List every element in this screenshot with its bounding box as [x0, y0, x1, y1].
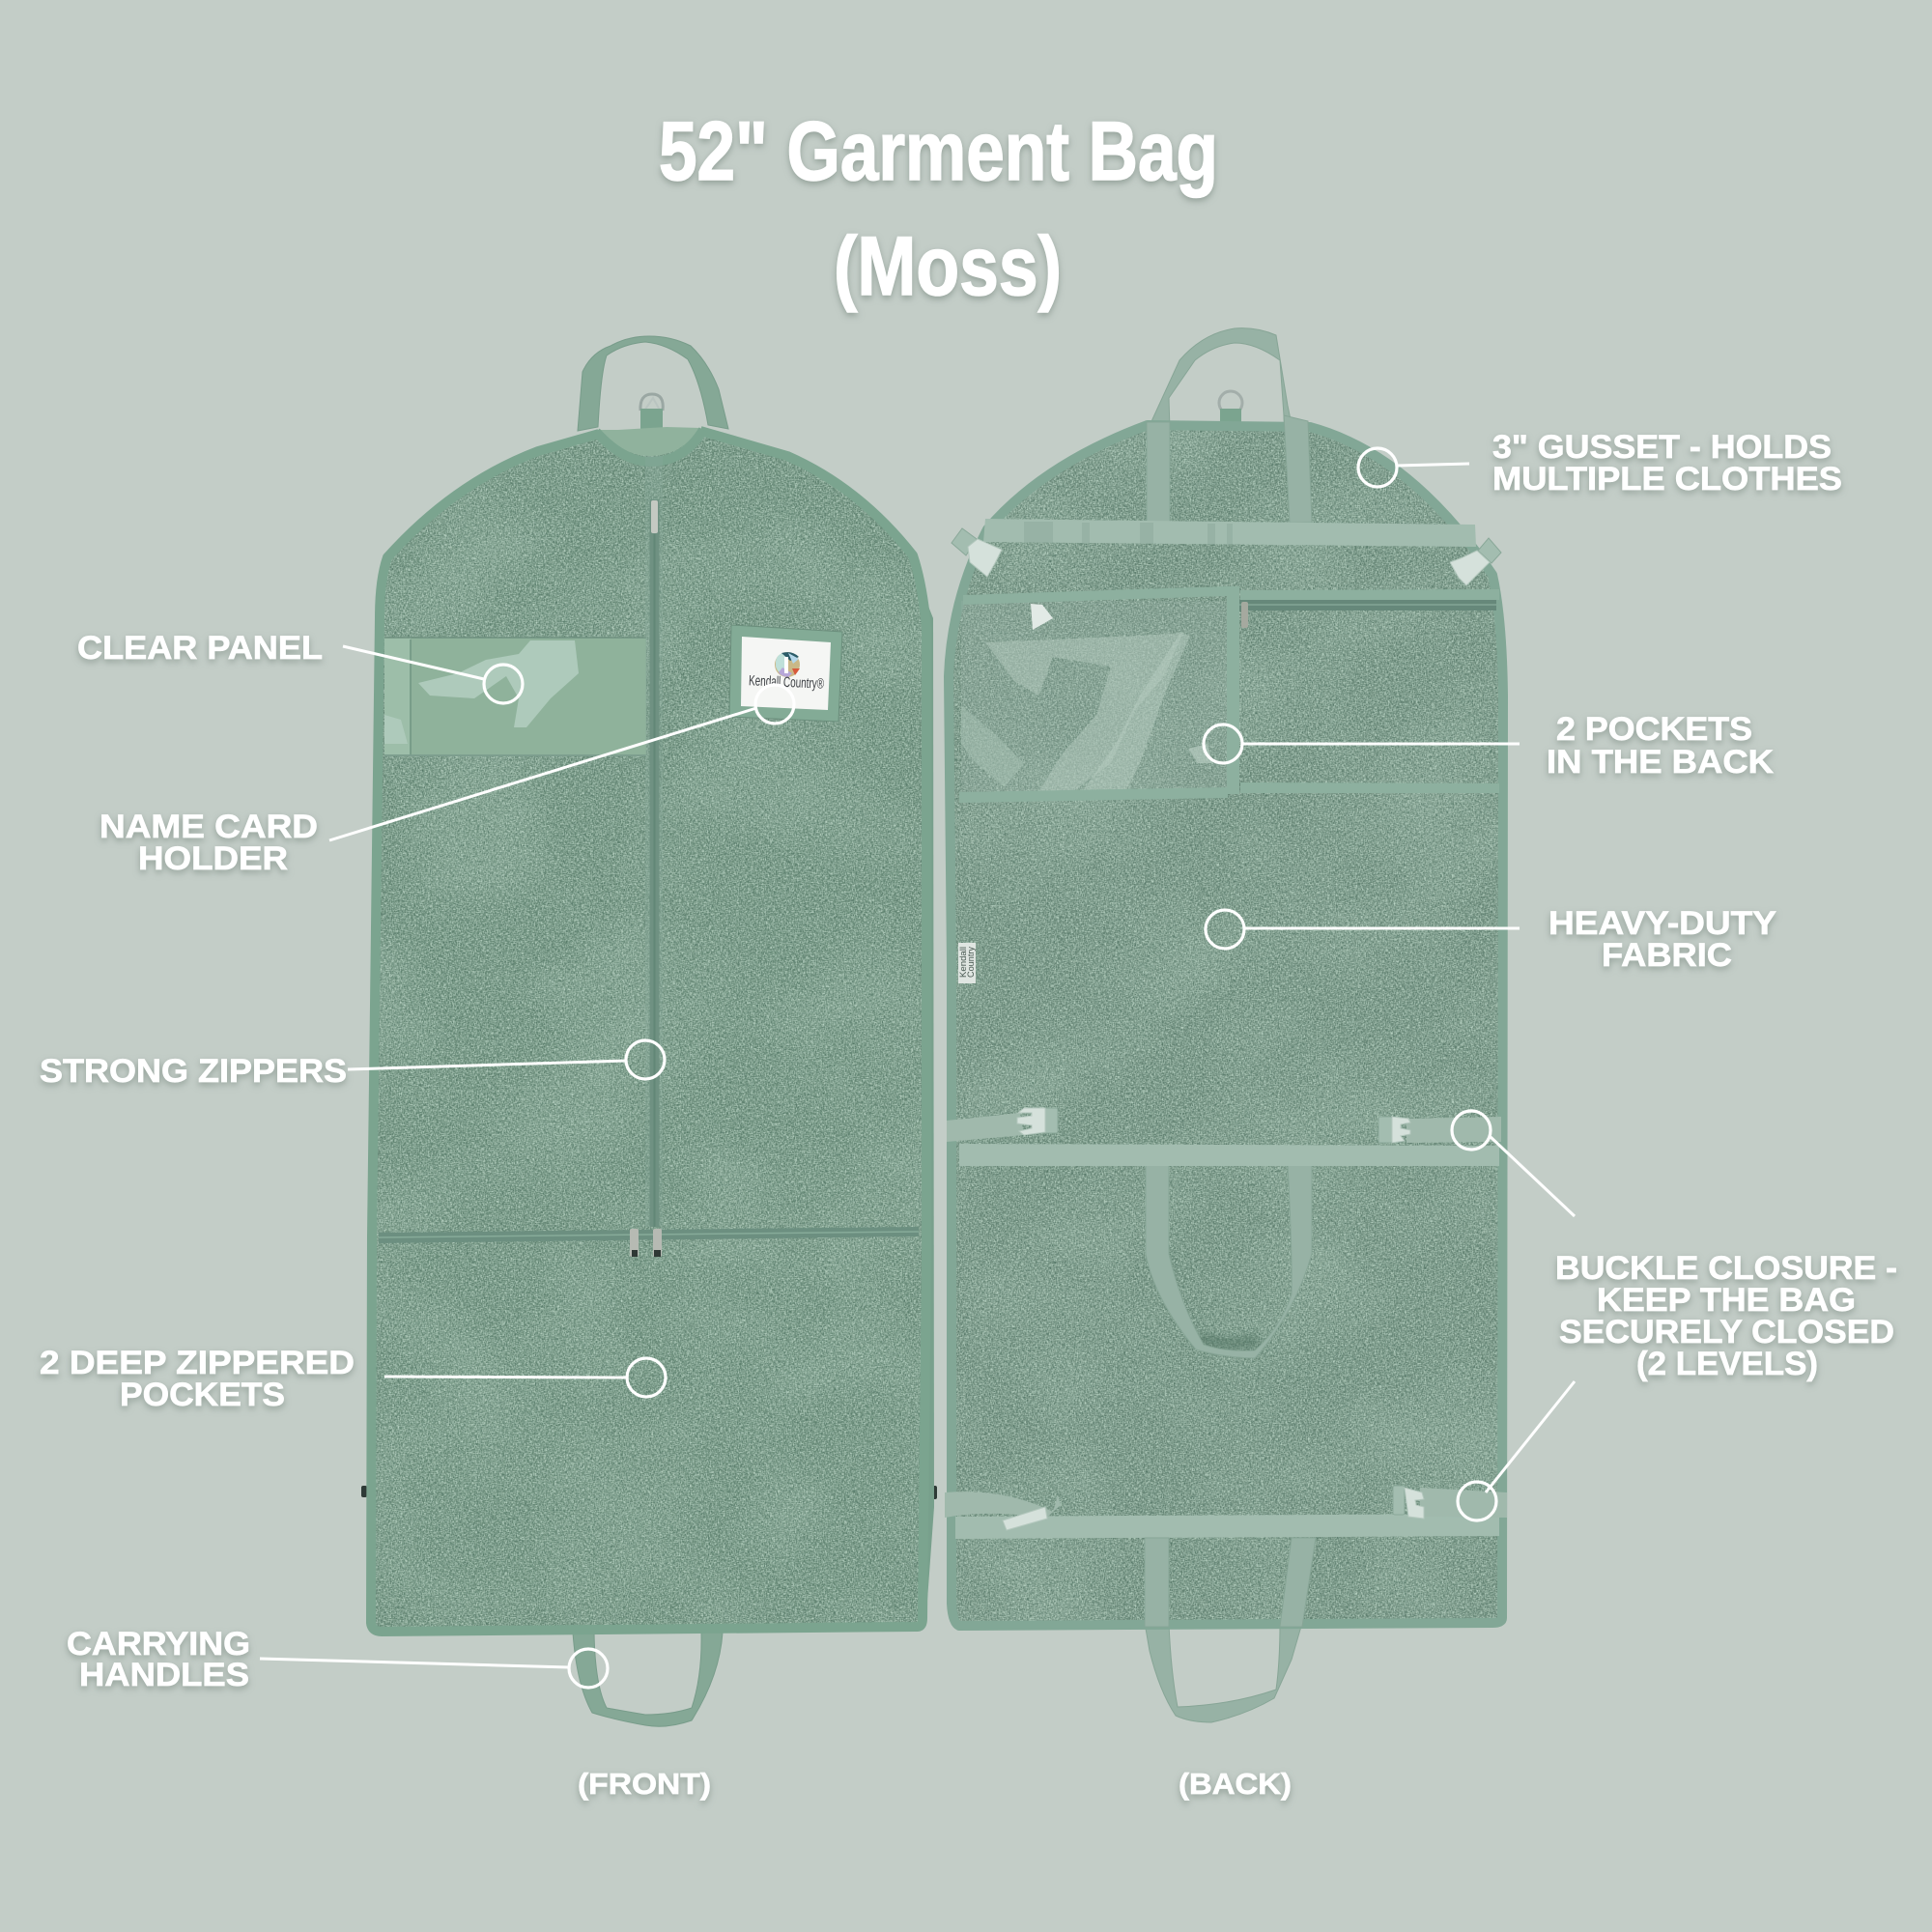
main vertical zipper — [645, 456, 663, 1227]
lower strap bands — [955, 1144, 1499, 1539]
back bottom handle — [1145, 1623, 1302, 1722]
callout: name card holder: HOLDER — [138, 840, 288, 877]
logo mark — [775, 652, 800, 677]
front side snaps — [361, 1486, 937, 1499]
callout: carrying handles: CARRYING — [67, 1626, 250, 1662]
woven side tag: Country — [966, 946, 976, 978]
front garment bag — [361, 336, 937, 1726]
callout: buckle closure: BUCKLE CLOSURE - — [1555, 1250, 1897, 1287]
back garment bag — [945, 328, 1507, 1722]
callout: carrying handles: HANDLES — [79, 1657, 249, 1693]
main zipper pull — [651, 500, 658, 533]
clear pocket — [961, 601, 1227, 792]
logo wordmark: Kendall Country® — [749, 672, 824, 693]
back handle top feet — [1147, 415, 1312, 523]
back D ring — [1219, 391, 1242, 422]
callout: gusset: MULTIPLE CLOTHES — [1492, 461, 1842, 497]
right strap and buckle — [1420, 1488, 1507, 1518]
woven side tag — [958, 943, 976, 983]
back binding — [949, 425, 1503, 1626]
callout: heavy-duty fabric — [1206, 905, 1776, 974]
front top handle — [578, 336, 728, 431]
callout: clear panel: CLEAR PANEL — [77, 630, 323, 667]
callout: buckle closure — [1452, 1111, 1897, 1520]
lower pocket zipper — [379, 1227, 919, 1257]
title: (Moss) — [834, 220, 1062, 313]
callout: name card holder: NAME CARD — [99, 809, 318, 845]
right top buckle — [1478, 538, 1501, 563]
title: 52" Garment Bag — [659, 105, 1218, 198]
callout: buckle closure: KEEP THE BAG — [1597, 1282, 1856, 1319]
callout: carrying handles — [67, 1626, 608, 1693]
callout: 2 deep zippered pockets — [40, 1345, 666, 1413]
left twisted strap and buckle — [945, 1492, 1061, 1519]
front D ring — [640, 394, 663, 433]
back pocket section — [959, 586, 1499, 803]
woven side tag: Kendall — [958, 947, 968, 978]
callout: clear panel — [77, 630, 523, 703]
lower level buckles — [945, 1486, 1507, 1530]
front neck opening — [596, 427, 703, 462]
caption: front: (FRONT) — [578, 1767, 711, 1801]
front bottom handle — [573, 1633, 723, 1726]
top buckles — [952, 528, 1501, 585]
back top handle — [1148, 328, 1312, 522]
back pocket zipper — [1239, 600, 1496, 628]
left strap and buckle — [947, 1113, 1024, 1142]
callout: 2 deep zippered pockets: 2 DEEP ZIPPERED — [40, 1345, 355, 1381]
callout: 2 deep zippered pockets: POCKETS — [120, 1377, 285, 1413]
upper level buckles — [947, 1108, 1501, 1143]
left top buckle — [952, 528, 977, 555]
title — [659, 105, 1218, 313]
caption: back: (BACK) — [1179, 1767, 1292, 1801]
callout: 2 pockets in the back: 2 POCKETS — [1556, 711, 1752, 748]
callout: 2 pockets in the back: IN THE BACK — [1547, 744, 1774, 781]
callout: buckle closure: (2 LEVELS) — [1636, 1346, 1818, 1382]
callout: name card holder — [99, 685, 794, 877]
name card holder — [729, 625, 842, 722]
callout: heavy-duty fabric: FABRIC — [1602, 937, 1732, 974]
back fabric body — [949, 425, 1503, 1626]
inner handle — [1146, 1164, 1312, 1358]
callout: 2 pockets in the back — [1204, 711, 1774, 781]
lower feet of bottom handle — [1145, 1538, 1316, 1627]
callout: gusset — [1358, 429, 1842, 497]
right strap and buckle — [1406, 1117, 1501, 1143]
pocket trim bands — [959, 586, 1499, 803]
front fabric body — [371, 431, 926, 1632]
back zipper pull — [1241, 602, 1248, 628]
callout: heavy-duty fabric: HEAVY-DUTY — [1548, 905, 1776, 942]
pocket zipper pulls — [630, 1229, 639, 1257]
front binding — [371, 431, 926, 1632]
front side gusset — [918, 580, 934, 1627]
callout: strong zippers: STRONG ZIPPERS — [40, 1053, 347, 1090]
callout: strong zippers — [40, 1040, 665, 1090]
callout: gusset: 3" GUSSET - HOLDS — [1492, 429, 1832, 466]
top strap band — [983, 519, 1476, 547]
callout: buckle closure: SECURELY CLOSED — [1559, 1314, 1894, 1350]
clear panel window — [384, 638, 646, 755]
